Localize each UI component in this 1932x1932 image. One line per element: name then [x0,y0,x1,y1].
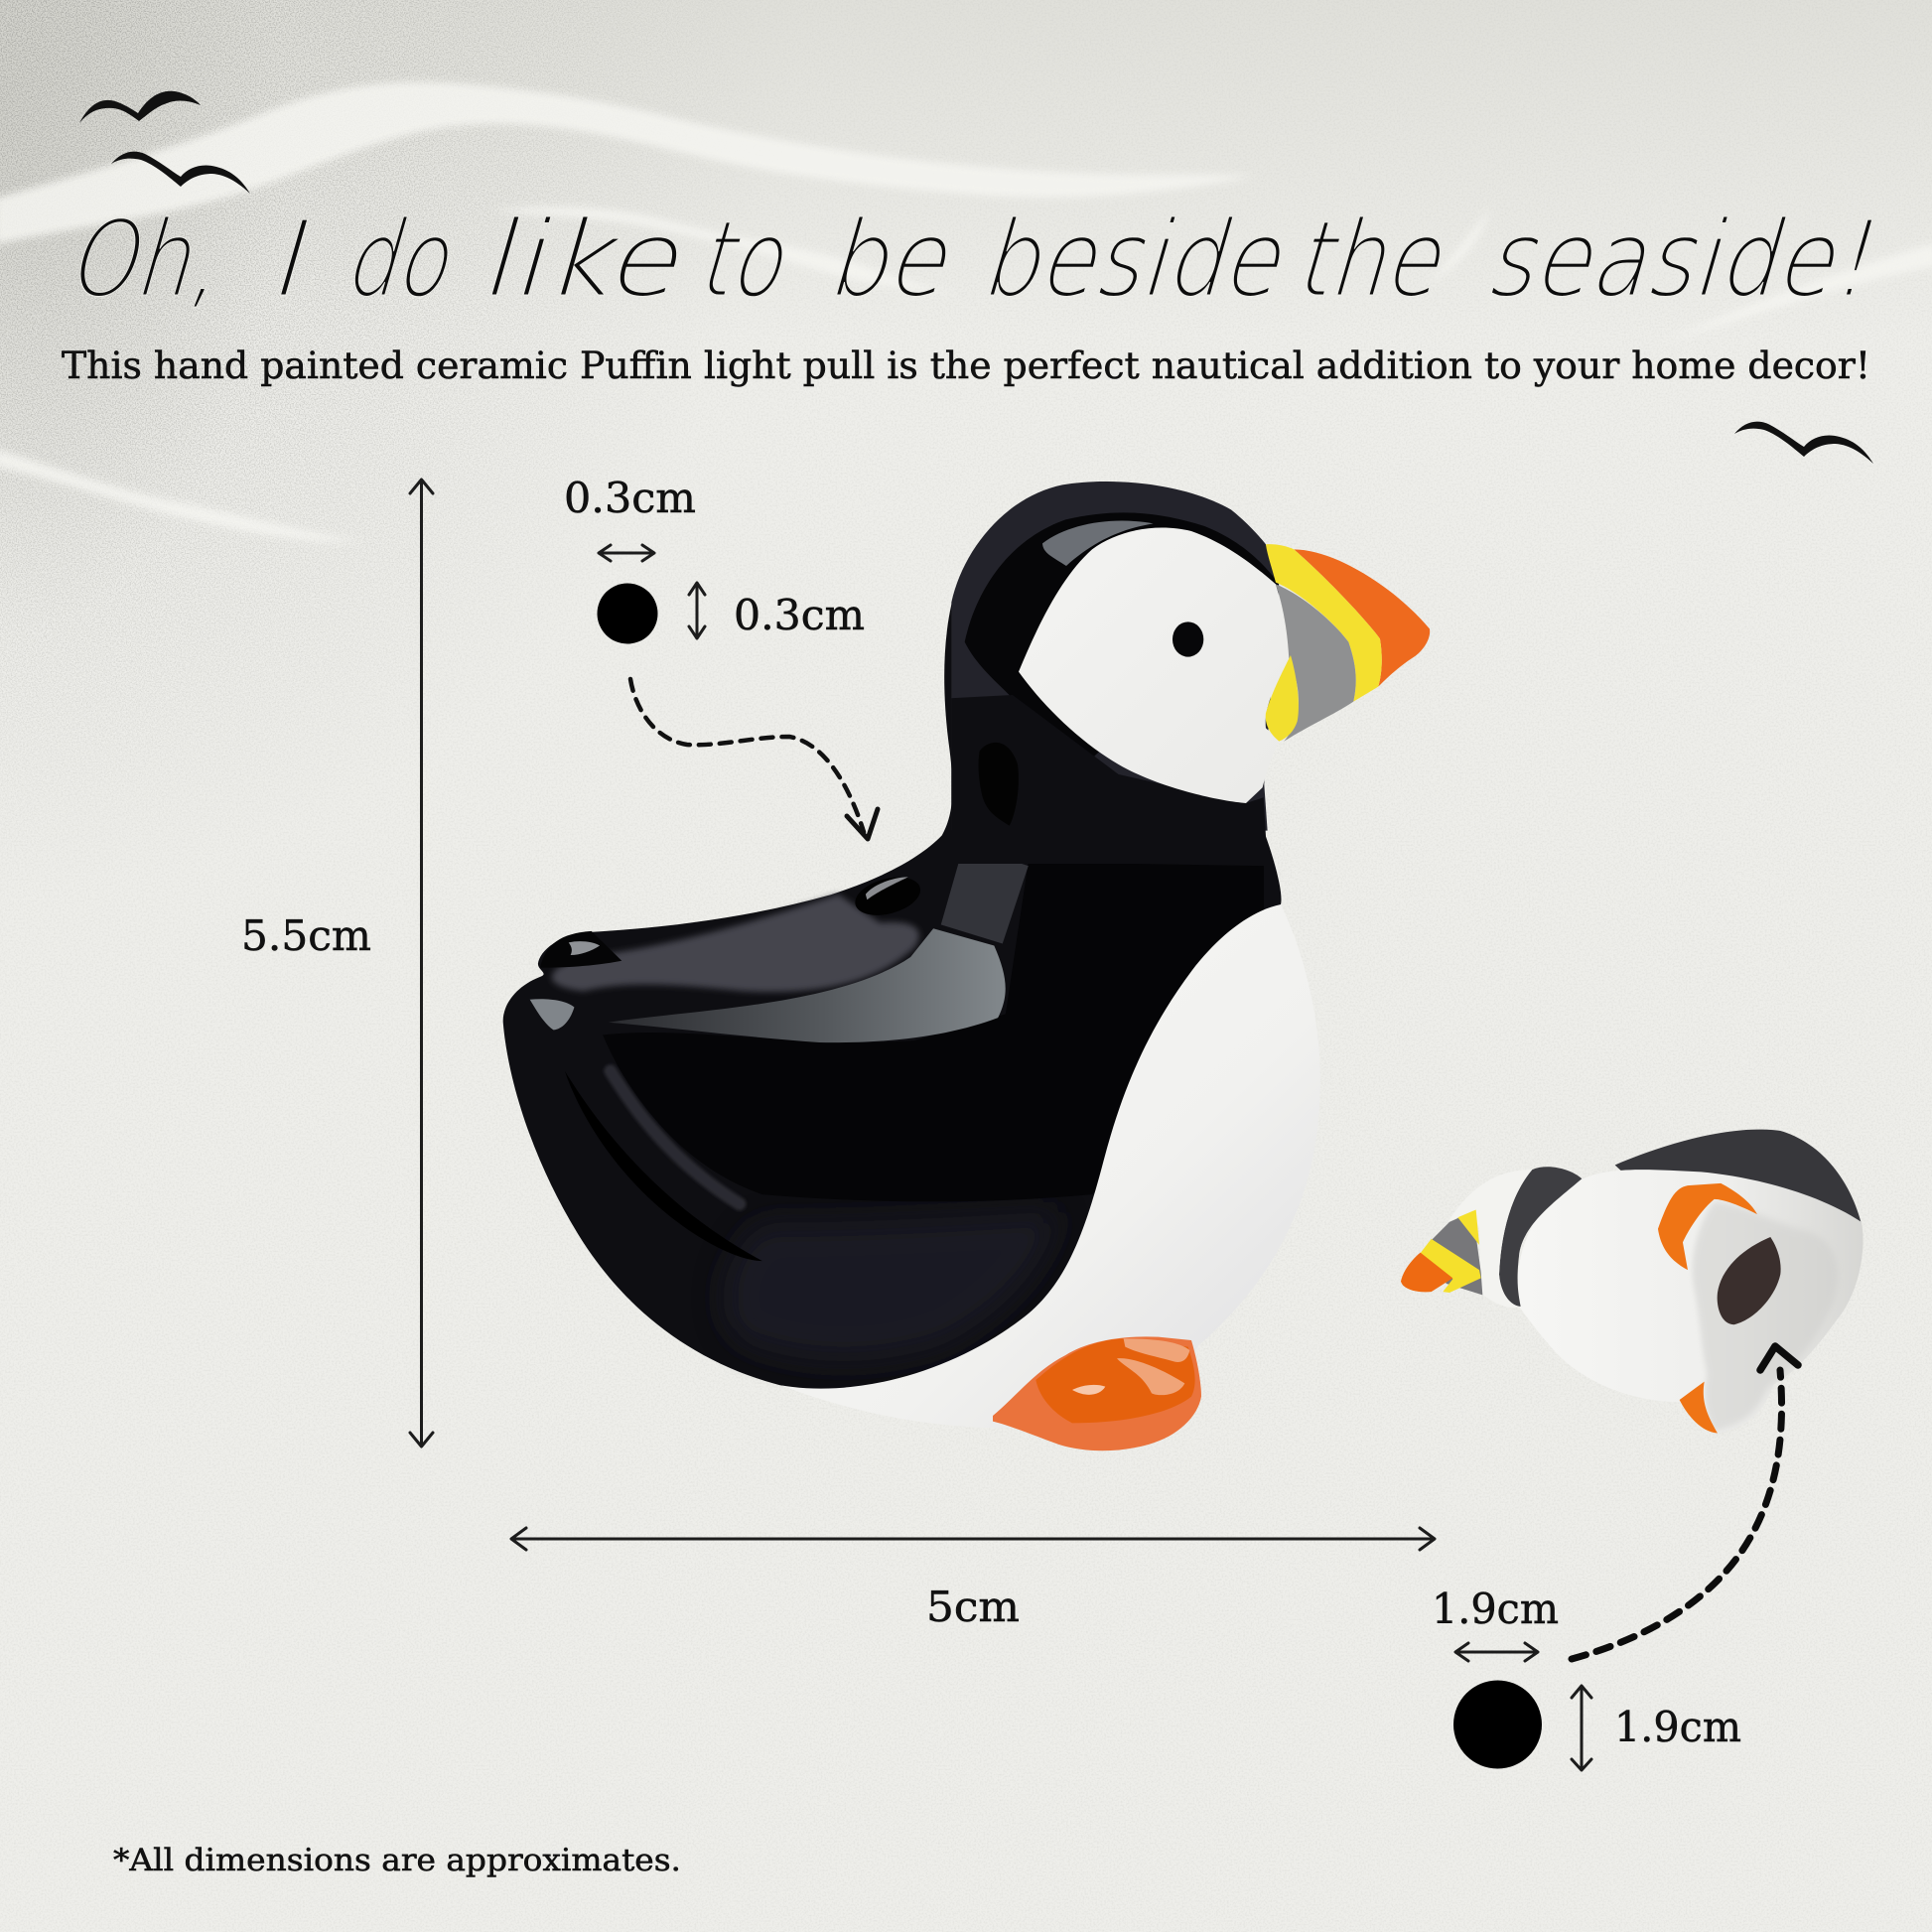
tail sheen [552,895,919,992]
large height arrow [1572,1686,1591,1770]
rump gloss [530,999,574,1030]
arrow: dashed to hanging hole [630,679,878,839]
icon: bird second [111,152,250,194]
beak yellow stripes [1420,1239,1481,1293]
dimension: height arrow [410,480,433,1447]
arrow: dashed to base hole [1572,1346,1798,1659]
beak yellow band [1266,544,1382,702]
foot [993,1336,1201,1450]
foot lower [1680,1382,1718,1433]
foot toe gloss [1117,1338,1189,1395]
footnote: *All dimensions are approximates. [113,1843,681,1878]
head glare [1042,521,1154,566]
subtitle: This hand painted ceramic Puffin light pull is the perfect nautical addition to your home decor! [62,345,1870,387]
small hole circle [598,584,657,643]
head [951,482,1430,864]
dimension: width arrow [511,1528,1435,1550]
body white [1517,1170,1863,1434]
title: to [689,201,805,320]
tail tip gloss [569,941,600,955]
base shading [1693,1201,1838,1432]
title: like [472,201,702,320]
eye [1173,621,1203,657]
title: Oh, [59,201,241,320]
beak grey [1276,584,1356,742]
label: 5.5cm: 5.5cm [241,911,371,960]
neck patch [941,845,1029,944]
beak orange [1294,549,1430,687]
small width arrow [599,545,654,561]
label: small width: 0.3cm [564,474,696,522]
large width arrow [1455,1643,1538,1661]
main puffin [503,482,1430,1450]
small hole diameter [564,474,865,643]
beak orange tip [1401,1253,1452,1292]
title: the [1287,201,1462,320]
neck dark [1499,1167,1582,1307]
label: large width: 1.9cm [1432,1585,1559,1633]
body gloss and shading [530,845,1264,1361]
head white [1448,1170,1532,1308]
title: seaside! [1477,201,1893,320]
label: large height: 1.9cm [1614,1703,1741,1751]
white belly [780,904,1320,1428]
title: I [261,201,326,320]
icon: bird top left [79,91,201,123]
icon: bird right [1734,422,1873,464]
wing inner black [603,862,1264,1201]
neck fill [951,695,1268,864]
foot upper [1658,1183,1757,1270]
large hole circle [1453,1680,1542,1769]
large hole diameter [1432,1585,1741,1770]
title [59,201,1893,320]
tail tip [540,931,621,968]
title: be [819,201,969,320]
ridge highlight [611,1071,740,1204]
foot spot [1072,1385,1105,1395]
main glare [609,928,1006,1042]
beak yellow lower [1266,655,1299,742]
label: 5cm: 5cm [926,1583,1020,1631]
lower body sheen [724,1211,1058,1361]
underside puffin [1401,1130,1863,1434]
back dark [1615,1130,1862,1229]
label: small height: 0.3cm [734,591,865,639]
white face [1019,527,1289,803]
hole [1718,1237,1781,1324]
small height arrow [689,583,705,638]
head rim [951,482,1279,831]
head black band [965,512,1279,764]
foot outer [993,1336,1201,1450]
hanging hole [851,871,924,921]
foot inner [1035,1338,1195,1423]
title: beside [973,201,1303,320]
neck blotch [979,743,1019,826]
beak grey [1432,1211,1482,1295]
puffin body black [503,482,1281,1397]
groove dark [565,1071,762,1261]
title: do [336,201,471,320]
beak yellow top [1457,1209,1479,1245]
